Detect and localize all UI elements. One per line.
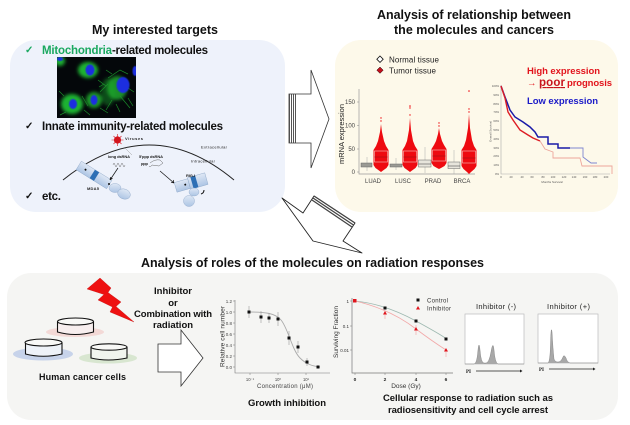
chart: mRNA expression beeswarm: 50 bbox=[348, 147, 356, 153]
chart: mRNA expression beeswarm: mRNA expression bbox=[337, 104, 346, 164]
icon: RIG-I molecule: RIG-I bbox=[186, 173, 195, 178]
legend: control and inhibitor: Control bbox=[427, 298, 448, 304]
arrow: 5'ppp dsRNA to RIG-I bbox=[160, 171, 174, 183]
chart: growth inhibition: 10⁻¹ bbox=[246, 377, 255, 382]
chart: survival curves: 80 bbox=[541, 175, 545, 179]
chart: survival curves: 140 bbox=[572, 175, 577, 179]
diagram: innate immunity pathway: ppp bbox=[141, 161, 149, 166]
chart: survival curves: 180 bbox=[593, 175, 598, 179]
item: etc.: etc. bbox=[42, 191, 61, 203]
chart: growth inhibition: 10⁰ bbox=[275, 377, 281, 382]
label: treatment bbox=[134, 286, 212, 331]
label: cellular response bbox=[383, 393, 553, 416]
chart: growth inhibition: 0.4 bbox=[226, 343, 232, 348]
chart: growth inhibition: 1.2 bbox=[226, 299, 232, 304]
chart: survival curves: 50% bbox=[493, 128, 500, 132]
chart: surviving fraction: 6 bbox=[445, 377, 448, 383]
item: mitochondria-related molecules: Mitochondria bbox=[42, 45, 113, 57]
item: etc.: ✓ bbox=[25, 191, 33, 202]
chart: survival curves: 160 bbox=[583, 175, 588, 179]
image: fluorescence micrograph bbox=[55, 56, 138, 118]
chart: survival curves: 20 bbox=[509, 175, 513, 179]
item: mitochondria-related molecules: ✓ bbox=[25, 45, 33, 56]
chart: mRNA expression beeswarm: BRCA bbox=[454, 179, 470, 185]
chart: survival curves: 70% bbox=[493, 110, 500, 114]
chart: surviving fraction: Surviving Fraction bbox=[333, 306, 340, 358]
label: growth inhibition: Growth inhibition bbox=[248, 398, 326, 409]
legend: control and inhibitor: Inhibitor bbox=[427, 306, 451, 312]
icon: MDA5 molecule: MDA5 bbox=[87, 186, 100, 191]
chart: growth inhibition: 0.8 bbox=[226, 321, 232, 326]
annotation: expression and prognosis bbox=[527, 66, 612, 107]
chart: survival curves: 90% bbox=[493, 93, 500, 97]
dish: blue bbox=[13, 339, 73, 360]
legend: tissue types bbox=[377, 56, 440, 76]
chart: growth inhibition: Relative cell number bbox=[220, 305, 226, 367]
label: treatment: Combination with bbox=[134, 309, 212, 320]
chart: survival curves: 60 bbox=[530, 175, 534, 179]
line: low expression bbox=[501, 86, 570, 148]
heading: analysis of relationship: the molecules and cancers bbox=[394, 23, 554, 37]
item: mitochondria-related molecules: -related molecules bbox=[112, 45, 208, 57]
item: innate immunity-related molecules: ✓ bbox=[25, 121, 33, 132]
item: mitochondria-related molecules bbox=[25, 45, 208, 57]
chart: surviving fraction: 2 bbox=[384, 377, 387, 383]
chart: survival curves: 10% bbox=[493, 163, 500, 167]
icon: lightning bolt bbox=[87, 278, 134, 322]
annotation: expression and prognosis: prognosis bbox=[567, 78, 612, 89]
annotation: expression and prognosis: Low expression bbox=[527, 96, 598, 107]
panel: molecules and cancers bbox=[335, 40, 618, 212]
chart: survival curves: 100 bbox=[551, 175, 556, 179]
chart: mRNA expression beeswarm bbox=[337, 89, 476, 185]
chart: survival curves: 80% bbox=[493, 102, 500, 106]
chart: survival curves: Overall Survival bbox=[488, 121, 492, 142]
chart: survival curves: 120 bbox=[562, 175, 567, 179]
chart: mRNA expression beeswarm: LUSC bbox=[395, 179, 412, 185]
diagram: innate immunity pathway: Intracellular bbox=[191, 158, 216, 164]
diagram: innate immunity pathway: long dsRNA bbox=[108, 154, 130, 159]
icon: virus bbox=[112, 134, 124, 146]
chart: surviving fraction: 0 bbox=[354, 377, 357, 383]
heading: analysis of roles: Analysis of roles of the molecules on radiation responses bbox=[141, 256, 484, 270]
icon: RIG-I molecule bbox=[174, 173, 208, 206]
annotation: expression and prognosis: poor bbox=[539, 77, 566, 89]
chart: surviving fraction: 0.01 bbox=[340, 348, 349, 353]
icon: MDA5 molecule bbox=[76, 161, 132, 201]
chart: growth inhibition: 0.6 bbox=[226, 332, 232, 337]
title: my interested targets: My interested targets bbox=[92, 23, 218, 37]
series: tumor swarms bbox=[374, 90, 476, 174]
chart: survival curves: 100% bbox=[492, 84, 500, 88]
label: cellular response: radiosensitivity and cell cycle arrest bbox=[388, 405, 549, 416]
line: high expression bbox=[501, 86, 540, 141]
legend: tissue types: Normal tissue bbox=[389, 56, 440, 64]
chart: cell cycle inhibitor minus bbox=[465, 302, 524, 375]
chart: survival curves: 200 bbox=[604, 175, 609, 179]
panel: interested targets bbox=[10, 40, 285, 212]
chart: surviving fraction: Dose (Gy) bbox=[391, 383, 421, 390]
icon: culture dishes bbox=[13, 318, 137, 364]
legend: tissue types: Tumor tissue bbox=[389, 66, 437, 76]
chart: survival curves: 60% bbox=[493, 119, 500, 123]
heading: analysis of relationship bbox=[377, 8, 571, 37]
line: control bbox=[355, 301, 446, 339]
chart: survival curves: 0 bbox=[500, 175, 502, 179]
chart: mRNA expression beeswarm: 100 bbox=[345, 124, 356, 130]
item: innate immunity-related molecules: Innate immunity-related molecules bbox=[42, 121, 223, 133]
panel: radiation responses bbox=[7, 273, 618, 420]
diagram: innate immunity pathway: Extracellular bbox=[201, 144, 228, 150]
chart: mRNA expression beeswarm: LUAD bbox=[365, 179, 382, 185]
heading: analysis of relationship: Analysis of relationship between bbox=[377, 8, 571, 22]
chart: growth inhibition: 1.0 bbox=[226, 310, 232, 315]
arrow: long dsRNA to MDA5 bbox=[110, 168, 118, 180]
dish: green bbox=[79, 344, 137, 364]
label: PI axis: PI bbox=[539, 368, 544, 373]
chart: surviving fraction bbox=[333, 298, 453, 390]
chart: survival curves: Months Survival bbox=[541, 180, 563, 184]
chart: surviving fraction: 0.1 bbox=[343, 324, 349, 329]
diagram: innate immunity pathway: 5'ppp dsRNA bbox=[139, 154, 163, 159]
diagram: innate immunity pathway bbox=[63, 134, 234, 206]
chart: growth inhibition bbox=[220, 299, 330, 390]
label: cellular response: Cellular response to radiation such as bbox=[383, 393, 553, 404]
chart: cell cycle inhibitor plus: Inhibitor (+) bbox=[547, 302, 590, 311]
item: etc. bbox=[25, 191, 61, 203]
label: treatment: Inhibitor bbox=[154, 286, 192, 297]
chart: survival curves: 30% bbox=[493, 146, 500, 150]
chart: growth inhibition: 0.0 bbox=[226, 365, 232, 370]
chart: surviving fraction: 4 bbox=[415, 377, 418, 383]
chart: cell cycle inhibitor plus bbox=[538, 302, 598, 373]
label: treatment: radiation bbox=[153, 320, 193, 331]
annotation: expression and prognosis: High expression bbox=[527, 66, 600, 77]
chart: survival curves: 0% bbox=[495, 172, 500, 176]
chart: survival curves bbox=[488, 84, 612, 184]
line: inhibitor bbox=[355, 301, 446, 350]
chart: survival curves: 40 bbox=[520, 175, 524, 179]
chart: growth inhibition: 10¹ bbox=[303, 377, 310, 382]
chart: survival curves: 40% bbox=[493, 137, 500, 141]
diagram: innate immunity pathway: Viruses bbox=[125, 136, 144, 141]
series: normal boxes bbox=[361, 147, 460, 174]
arrow: cancers to radiation analysis bbox=[282, 196, 362, 253]
annotation: expression and prognosis: → bbox=[527, 78, 536, 89]
arrow: targets to cancers bbox=[289, 70, 329, 168]
legend: control and inhibitor bbox=[416, 298, 451, 312]
chart: cell cycle inhibitor minus: Inhibitor (-) bbox=[476, 302, 516, 311]
chart: mRNA expression beeswarm: 0 bbox=[352, 170, 356, 176]
chart: growth inhibition: 0.2 bbox=[226, 354, 232, 359]
chart: survival curves: 20% bbox=[493, 154, 500, 158]
label: treatment: or bbox=[168, 298, 178, 309]
arrow: treatment bbox=[158, 330, 203, 386]
chart: mRNA expression beeswarm: PRAD bbox=[425, 179, 442, 185]
chart: mRNA expression beeswarm: 150 bbox=[345, 100, 356, 106]
label: PI axis: PI bbox=[466, 370, 471, 375]
dish: pink bbox=[46, 318, 104, 337]
chart: growth inhibition: Concentration (μM) bbox=[257, 384, 313, 390]
series: tumor boxes bbox=[374, 150, 476, 163]
chart: surviving fraction: 1 bbox=[346, 299, 349, 304]
label: human cancer cells: Human cancer cells bbox=[39, 372, 126, 382]
